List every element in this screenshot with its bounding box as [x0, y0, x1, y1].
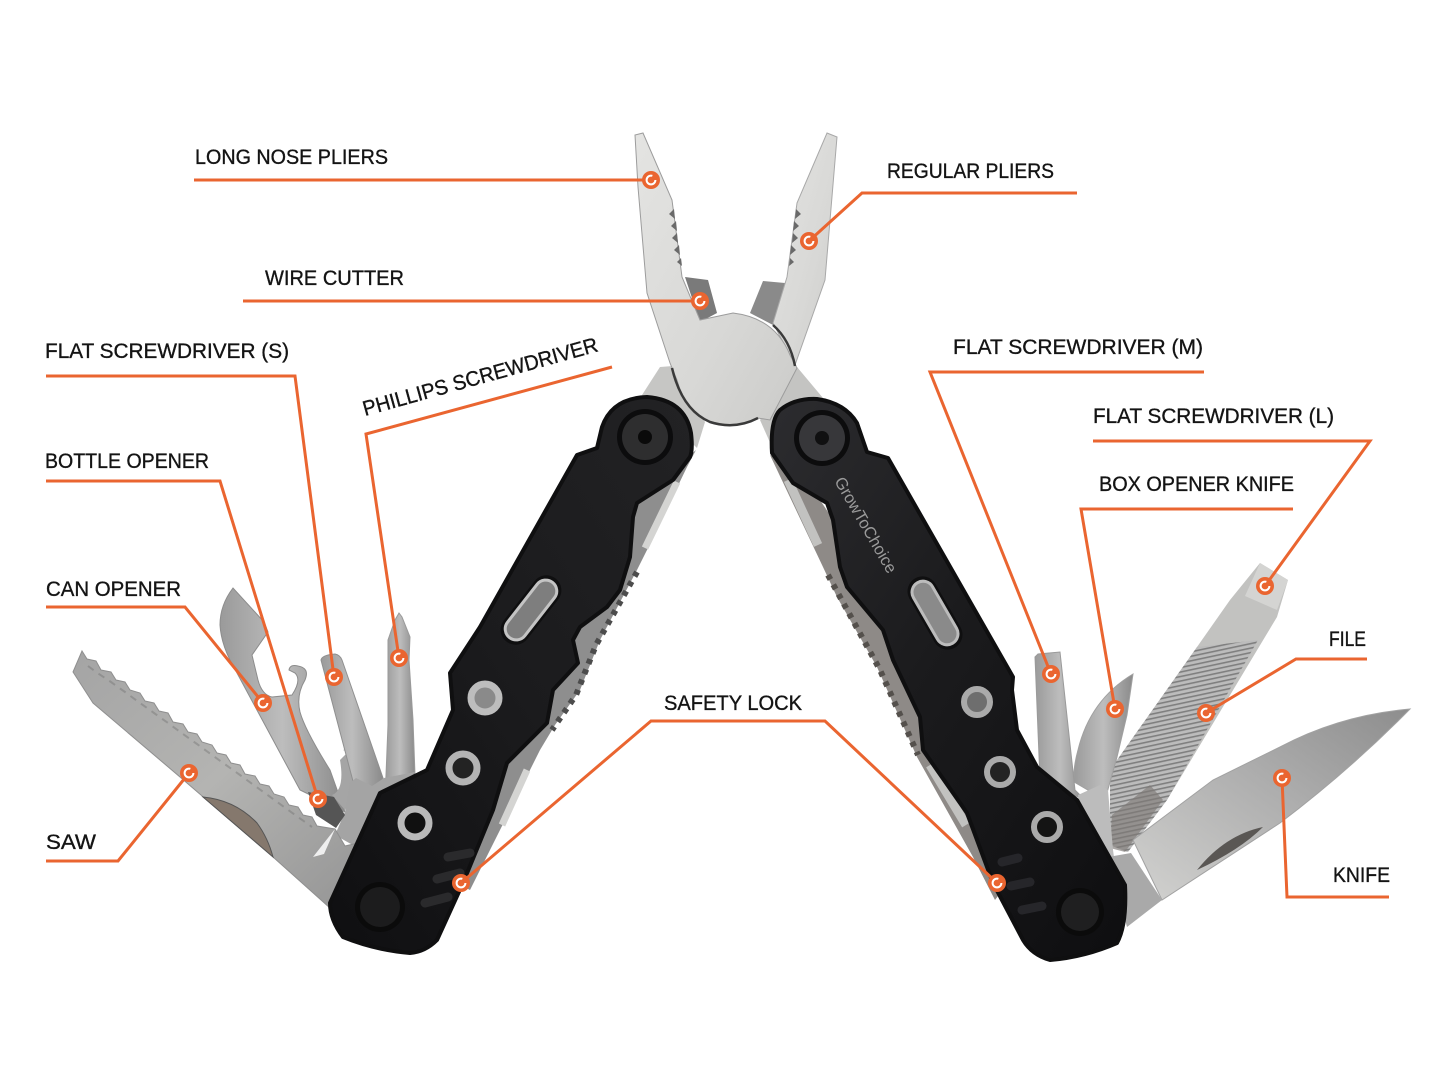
tool: phillips screwdriver — [385, 613, 415, 800]
lock ridges — [1002, 858, 1042, 910]
right handle — [772, 399, 1125, 960]
callout: phillips screwdriver — [360, 334, 612, 667]
callout: can opener: CAN OPENER — [46, 578, 181, 601]
callout: wire cutter: WIRE CUTTER — [265, 267, 404, 290]
pliers: left jaw with pivot — [635, 133, 797, 425]
callout: can opener — [46, 578, 272, 712]
callout: file: FILE — [1329, 628, 1366, 651]
left highlights — [502, 482, 677, 825]
left handle silver edge — [450, 450, 696, 890]
callout: knife — [1273, 769, 1390, 897]
callout: box opener knife: BOX OPENER KNIFE — [1099, 473, 1294, 496]
tool: knife — [1108, 709, 1410, 927]
pliers: right jaw teeth — [789, 209, 801, 266]
pliers: right jaw — [773, 133, 837, 365]
top screw — [617, 409, 673, 465]
callout: saw — [46, 764, 198, 861]
callout: long nose pliers — [194, 146, 660, 189]
pivot edge shadow — [672, 325, 795, 425]
tool: lower stems — [1078, 785, 1120, 900]
callout: long nose pliers: LONG NOSE PLIERS — [195, 146, 388, 169]
callout: bottle opener: BOTTLE OPENER — [45, 450, 209, 473]
callout: phillips screwdriver: PHILLIPS SCREWDRIVER — [360, 334, 600, 421]
tool: lower tab base — [335, 772, 415, 848]
callout: flat screwdriver small: FLAT SCREWDRIVER (S) — [45, 340, 289, 363]
left handle — [330, 397, 692, 953]
callout: bottle opener — [45, 450, 327, 808]
bottom screw — [1056, 888, 1104, 936]
callout: flat screwdriver small — [45, 340, 343, 686]
bottom screw — [355, 882, 405, 932]
callout: regular pliers — [800, 160, 1077, 250]
tool: flat screwdriver medium — [1035, 652, 1085, 800]
slot — [495, 569, 567, 651]
callout: saw: SAW — [46, 831, 96, 854]
callout: wire cutter — [243, 267, 709, 310]
pliers: left tang — [642, 366, 705, 448]
callout: flat screwdriver large — [1093, 405, 1370, 595]
eyelets — [964, 689, 1060, 840]
brand name: GrowToChoice — [831, 474, 900, 577]
top screw — [794, 410, 850, 466]
shadow behind saw — [308, 792, 345, 828]
right highlights — [788, 480, 966, 825]
pliers: left jaw teeth — [669, 209, 682, 266]
callout: file — [1197, 628, 1367, 722]
tool: file — [1110, 563, 1288, 852]
callout: safety lock — [452, 692, 1006, 892]
tool illustration: multitool — [73, 133, 1410, 960]
serrations left — [552, 572, 637, 730]
callout: knife: KNIFE — [1333, 864, 1390, 887]
tool: flat screwdriver small — [321, 654, 383, 790]
tool: box opener knife — [1074, 674, 1133, 800]
right handle silver edge — [770, 455, 1010, 900]
tool: saw — [73, 651, 358, 908]
callout: flat screwdriver medium: FLAT SCREWDRIVER (M) — [953, 336, 1203, 359]
lock ridges — [425, 853, 470, 903]
eyelets — [401, 684, 499, 837]
callout: box opener knife — [1081, 473, 1294, 718]
callout: flat screwdriver medium — [930, 336, 1204, 683]
pliers: right tang — [760, 367, 823, 447]
pliers: wire cutters — [685, 277, 785, 325]
slot — [902, 571, 968, 655]
tool: can opener and bottle opener blade — [220, 588, 360, 812]
callout: regular pliers: REGULAR PLIERS — [887, 160, 1054, 183]
serrations right — [828, 575, 918, 755]
callout: flat screwdriver large: FLAT SCREWDRIVER (L) — [1093, 405, 1334, 428]
callout: safety lock: SAFETY LOCK — [664, 692, 802, 715]
